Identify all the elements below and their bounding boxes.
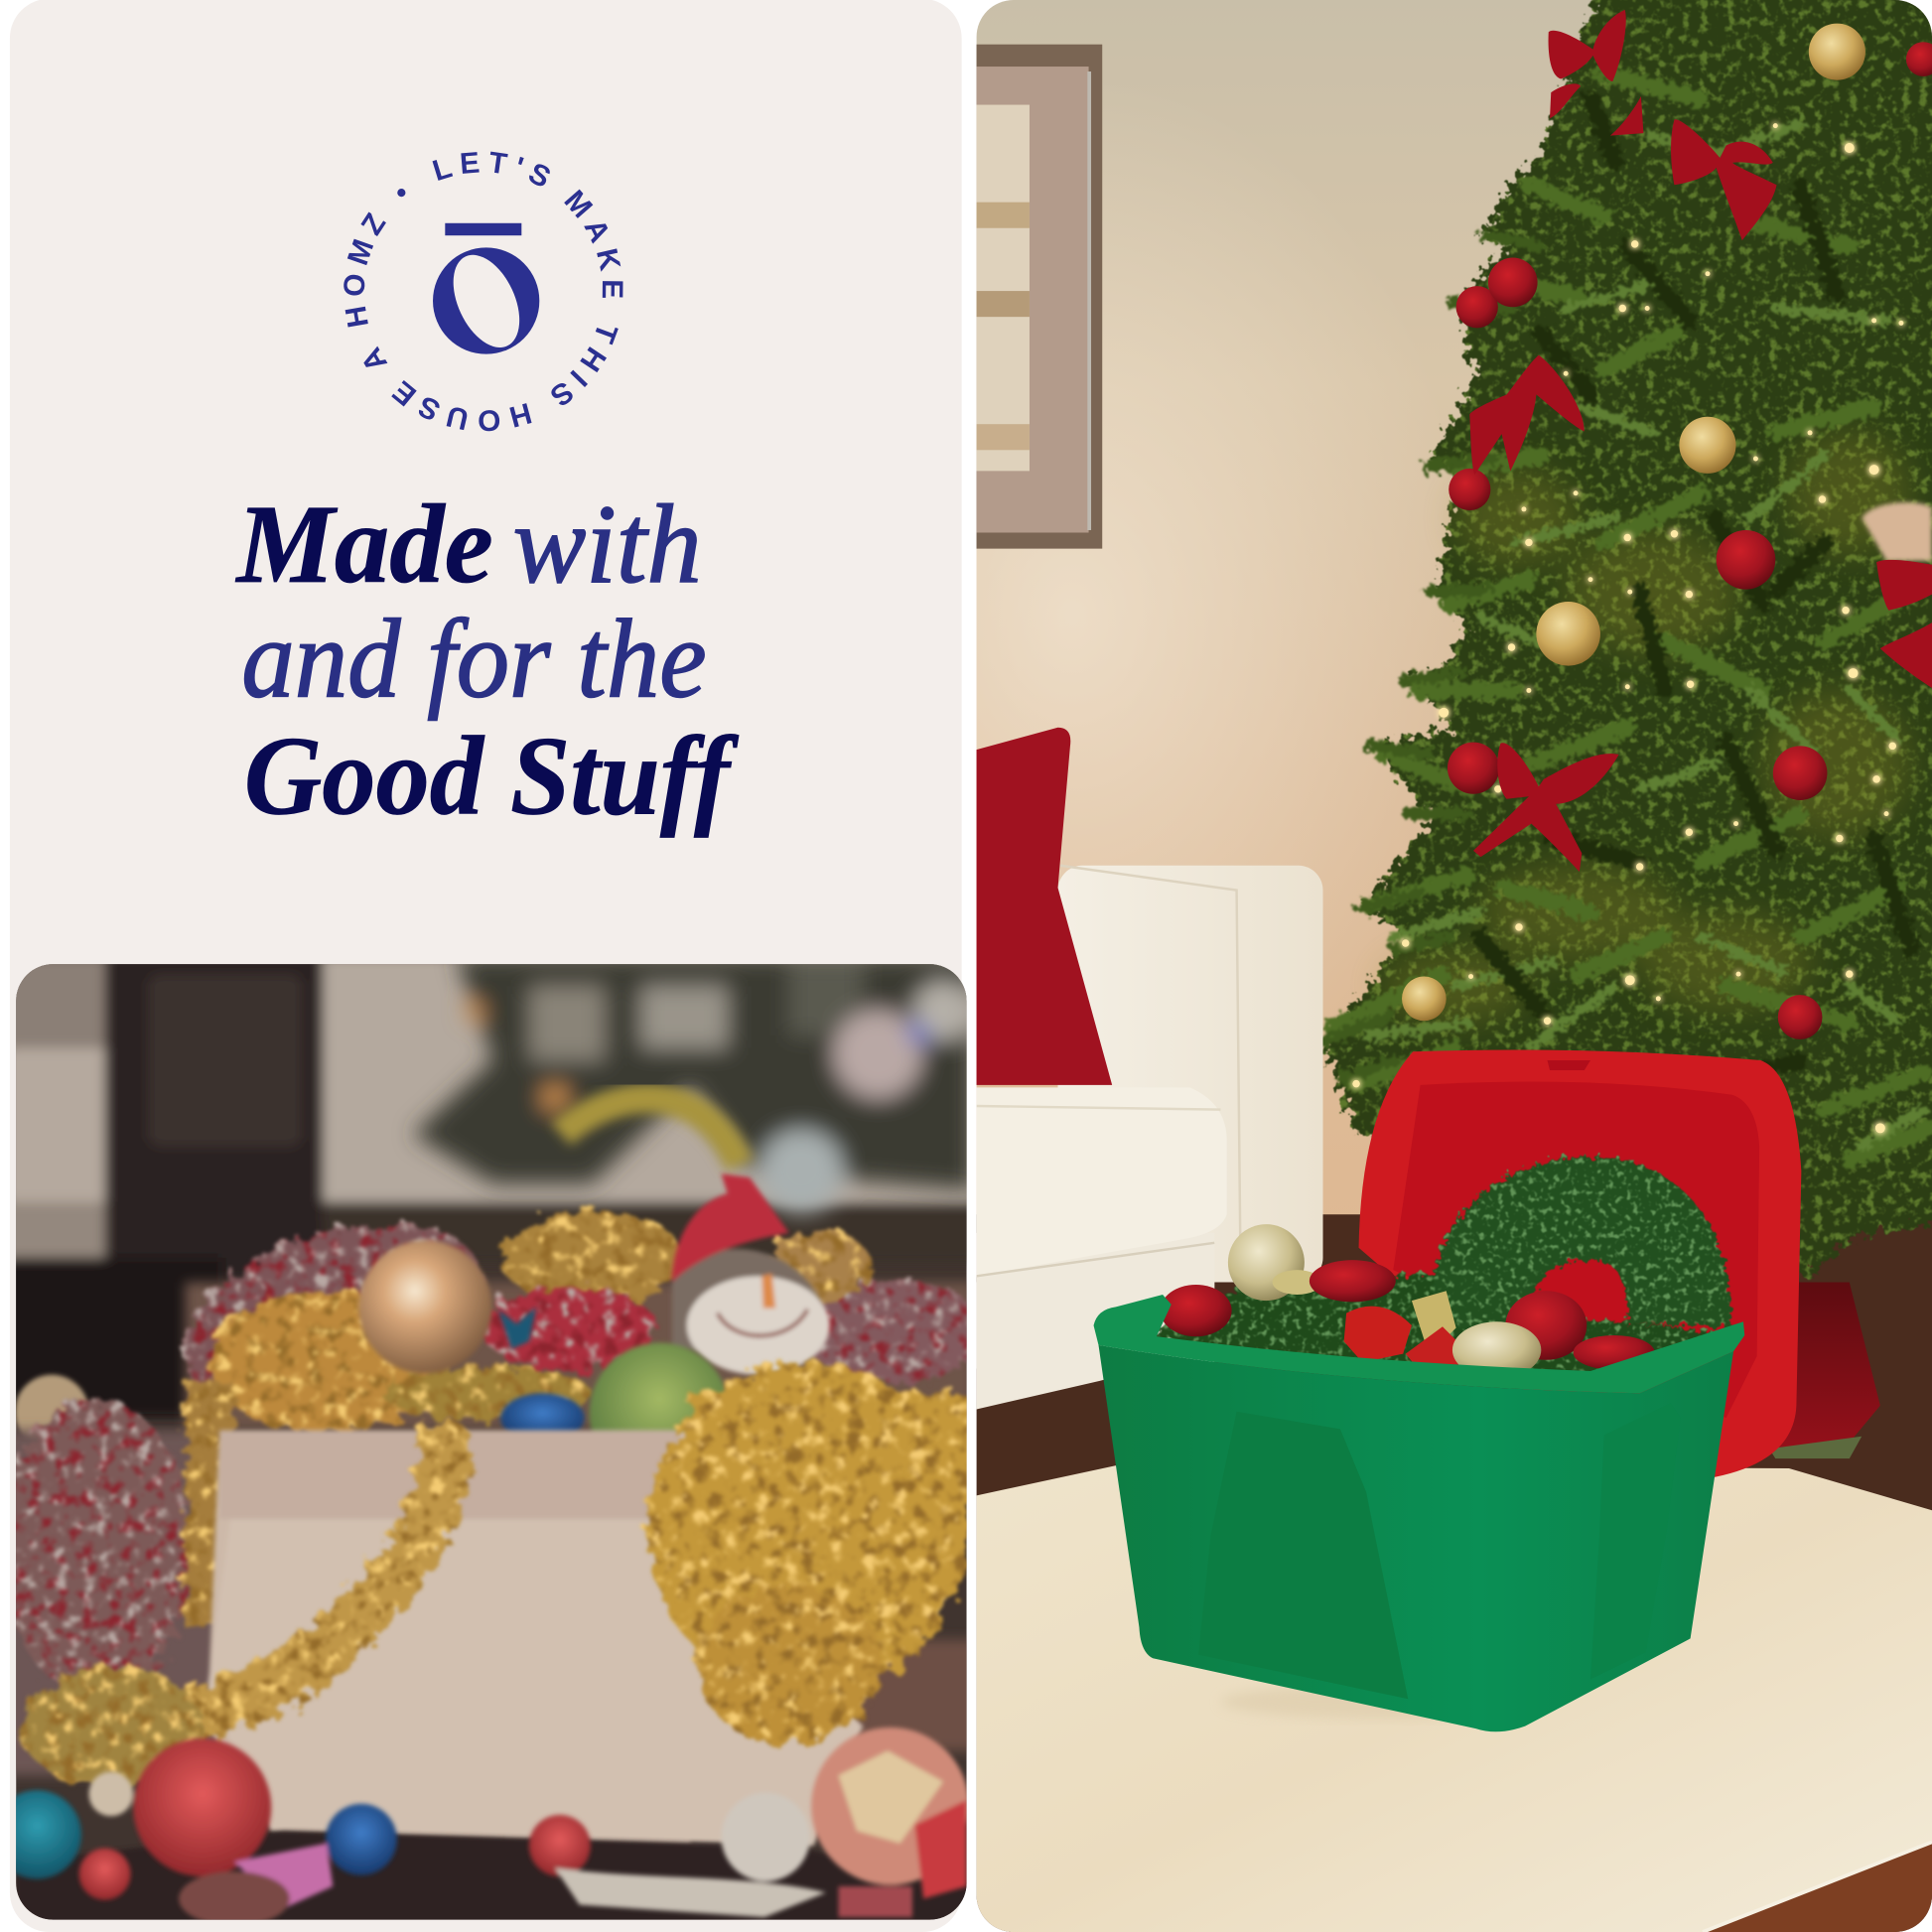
heading: with: [513, 483, 702, 607]
wreath: [1482, 1208, 1680, 1325]
ornaments in bin: [1161, 1224, 1655, 1378]
blurred room background: [0, 955, 977, 1418]
wall gap in branches: [1862, 502, 1932, 561]
heading: [234, 483, 740, 839]
red lid: [1359, 1049, 1801, 1479]
butterfly: [498, 1307, 536, 1349]
large gold tinsel: [647, 1362, 974, 1744]
blurred tree behind: [413, 955, 974, 1213]
gold tinsel behind: [185, 1211, 870, 1627]
wall: [977, 0, 1932, 1283]
heading: Made: [234, 483, 493, 607]
heading: Good Stuff: [244, 715, 740, 839]
beige ornament at left: [15, 1375, 88, 1449]
gold garland draped over box: [74, 1445, 444, 1757]
lower left tinsel: [19, 1667, 204, 1785]
logo badge: [344, 151, 623, 431]
red tinsel centre: [481, 1288, 658, 1371]
ornaments on tree: [1402, 24, 1932, 1039]
red cushion: [968, 728, 1112, 1085]
under-tinsel shading: [0, 1283, 986, 1775]
tree lights: [1352, 123, 1903, 1133]
garland in bin: [1153, 1274, 1726, 1387]
left recess: [1198, 1412, 1408, 1699]
blue and green baubles: [500, 1393, 585, 1443]
bin rim: [1094, 1295, 1744, 1393]
white sofa: [968, 728, 1323, 1409]
right recess: [1590, 1403, 1681, 1679]
christmas tree: [1325, 0, 1932, 1283]
panel: headline card: [10, 0, 961, 1932]
rug: [977, 1464, 1932, 1932]
warm light glow: [1381, 432, 1911, 1024]
photo: box of tinsel and ornaments: [0, 955, 986, 1926]
rug shadow under bin: [1220, 1684, 1541, 1719]
tree skirt and stand: [1775, 1283, 1880, 1449]
floor: [977, 1214, 1932, 1932]
snowman toy: [672, 1173, 830, 1375]
red and silver tinsel mound: [0, 1225, 986, 1696]
cardboard box: [207, 1431, 863, 1850]
photo: green storage bin beside Christmas tree: [968, 0, 1932, 1932]
red bows on tree: [1469, 10, 1932, 872]
green bin: [1094, 1295, 1744, 1731]
scattered baubles: [0, 1727, 969, 1926]
framed picture: [968, 45, 1102, 549]
dark floor: [16, 1831, 974, 1923]
circular tagline: LET'S MAKE THIS HOUSE A HOMZ: [344, 151, 623, 431]
heading: and for the: [241, 598, 707, 722]
gold bauble: [358, 1240, 492, 1373]
